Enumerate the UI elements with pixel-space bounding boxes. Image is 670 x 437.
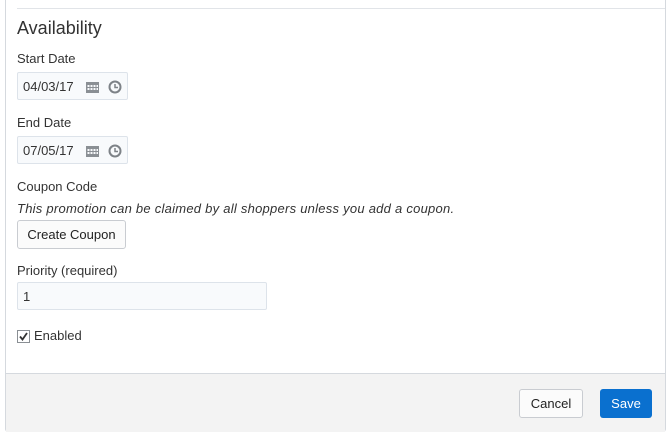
button: Create Coupon <box>17 220 126 249</box>
button: Cancel <box>519 389 583 418</box>
button: Cancel: Cancel <box>531 396 571 411</box>
input: end date: 07/05/17 <box>23 143 74 158</box>
icon: calendar <box>86 82 99 93</box>
label: Coupon Code: Coupon Code <box>17 179 97 194</box>
help text: This promotion can be claimed by all shoppers unless you add a coupon. <box>17 201 454 216</box>
label: Start Date: Start Date <box>17 51 76 66</box>
icon: clock <box>108 80 122 94</box>
label: Priority: Priority (required) <box>17 263 117 278</box>
icon: clock <box>108 144 122 158</box>
button: Save: Save <box>611 396 641 411</box>
footer <box>6 373 665 432</box>
heading: Availability: Availability <box>17 18 102 38</box>
input: start date <box>17 72 128 100</box>
button: Save <box>600 389 652 418</box>
checkbox: Enabled: Enabled <box>34 328 82 343</box>
icon: calendar <box>86 146 99 157</box>
button: Create Coupon: Create Coupon <box>27 227 116 242</box>
input: end date <box>17 136 128 164</box>
input: priority: 1 <box>23 289 30 304</box>
input: start date: 04/03/17 <box>23 79 74 94</box>
input: priority <box>17 282 267 310</box>
label: End Date: End Date <box>17 115 71 130</box>
